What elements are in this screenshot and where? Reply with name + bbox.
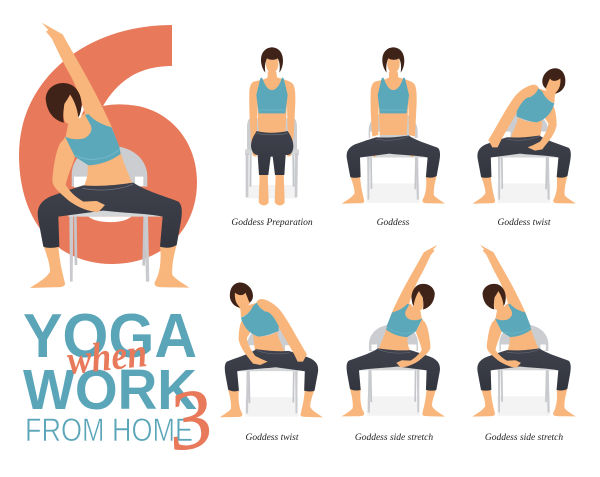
figure: goddess twist, leaning right xyxy=(472,68,576,204)
big number 6 xyxy=(19,25,197,264)
label: Goddess side stretch, centre: Goddess side stretch xyxy=(355,433,433,443)
figure: goddess xyxy=(342,47,445,204)
title word: YOGA: YOGA xyxy=(23,302,197,371)
figure: goddess side stretch, arm to left xyxy=(472,245,576,417)
figure: goddess twist, leaning left xyxy=(220,283,323,417)
label: Goddess twist, top row: Goddess twist xyxy=(497,218,551,228)
label: Goddess side stretch, right: Goddess side stretch xyxy=(485,433,563,443)
label: Goddess Preparation: Goddess Preparation xyxy=(231,218,313,228)
figure: goddess preparation xyxy=(245,47,299,205)
hero figure: goddess side stretch xyxy=(30,23,189,288)
script word: when: when xyxy=(65,329,149,383)
label: Goddess: Goddess xyxy=(377,218,410,228)
figure: goddess side stretch, arm to right xyxy=(342,245,445,417)
label: Goddess twist, bottom row: Goddess twist xyxy=(245,433,299,443)
title line: FROM HOME: FROM HOME xyxy=(25,412,193,448)
title word: WORK: WORK xyxy=(23,358,197,422)
title: yoga when work from home 3 xyxy=(23,302,220,470)
script numeral: 3: 3 xyxy=(161,371,220,470)
